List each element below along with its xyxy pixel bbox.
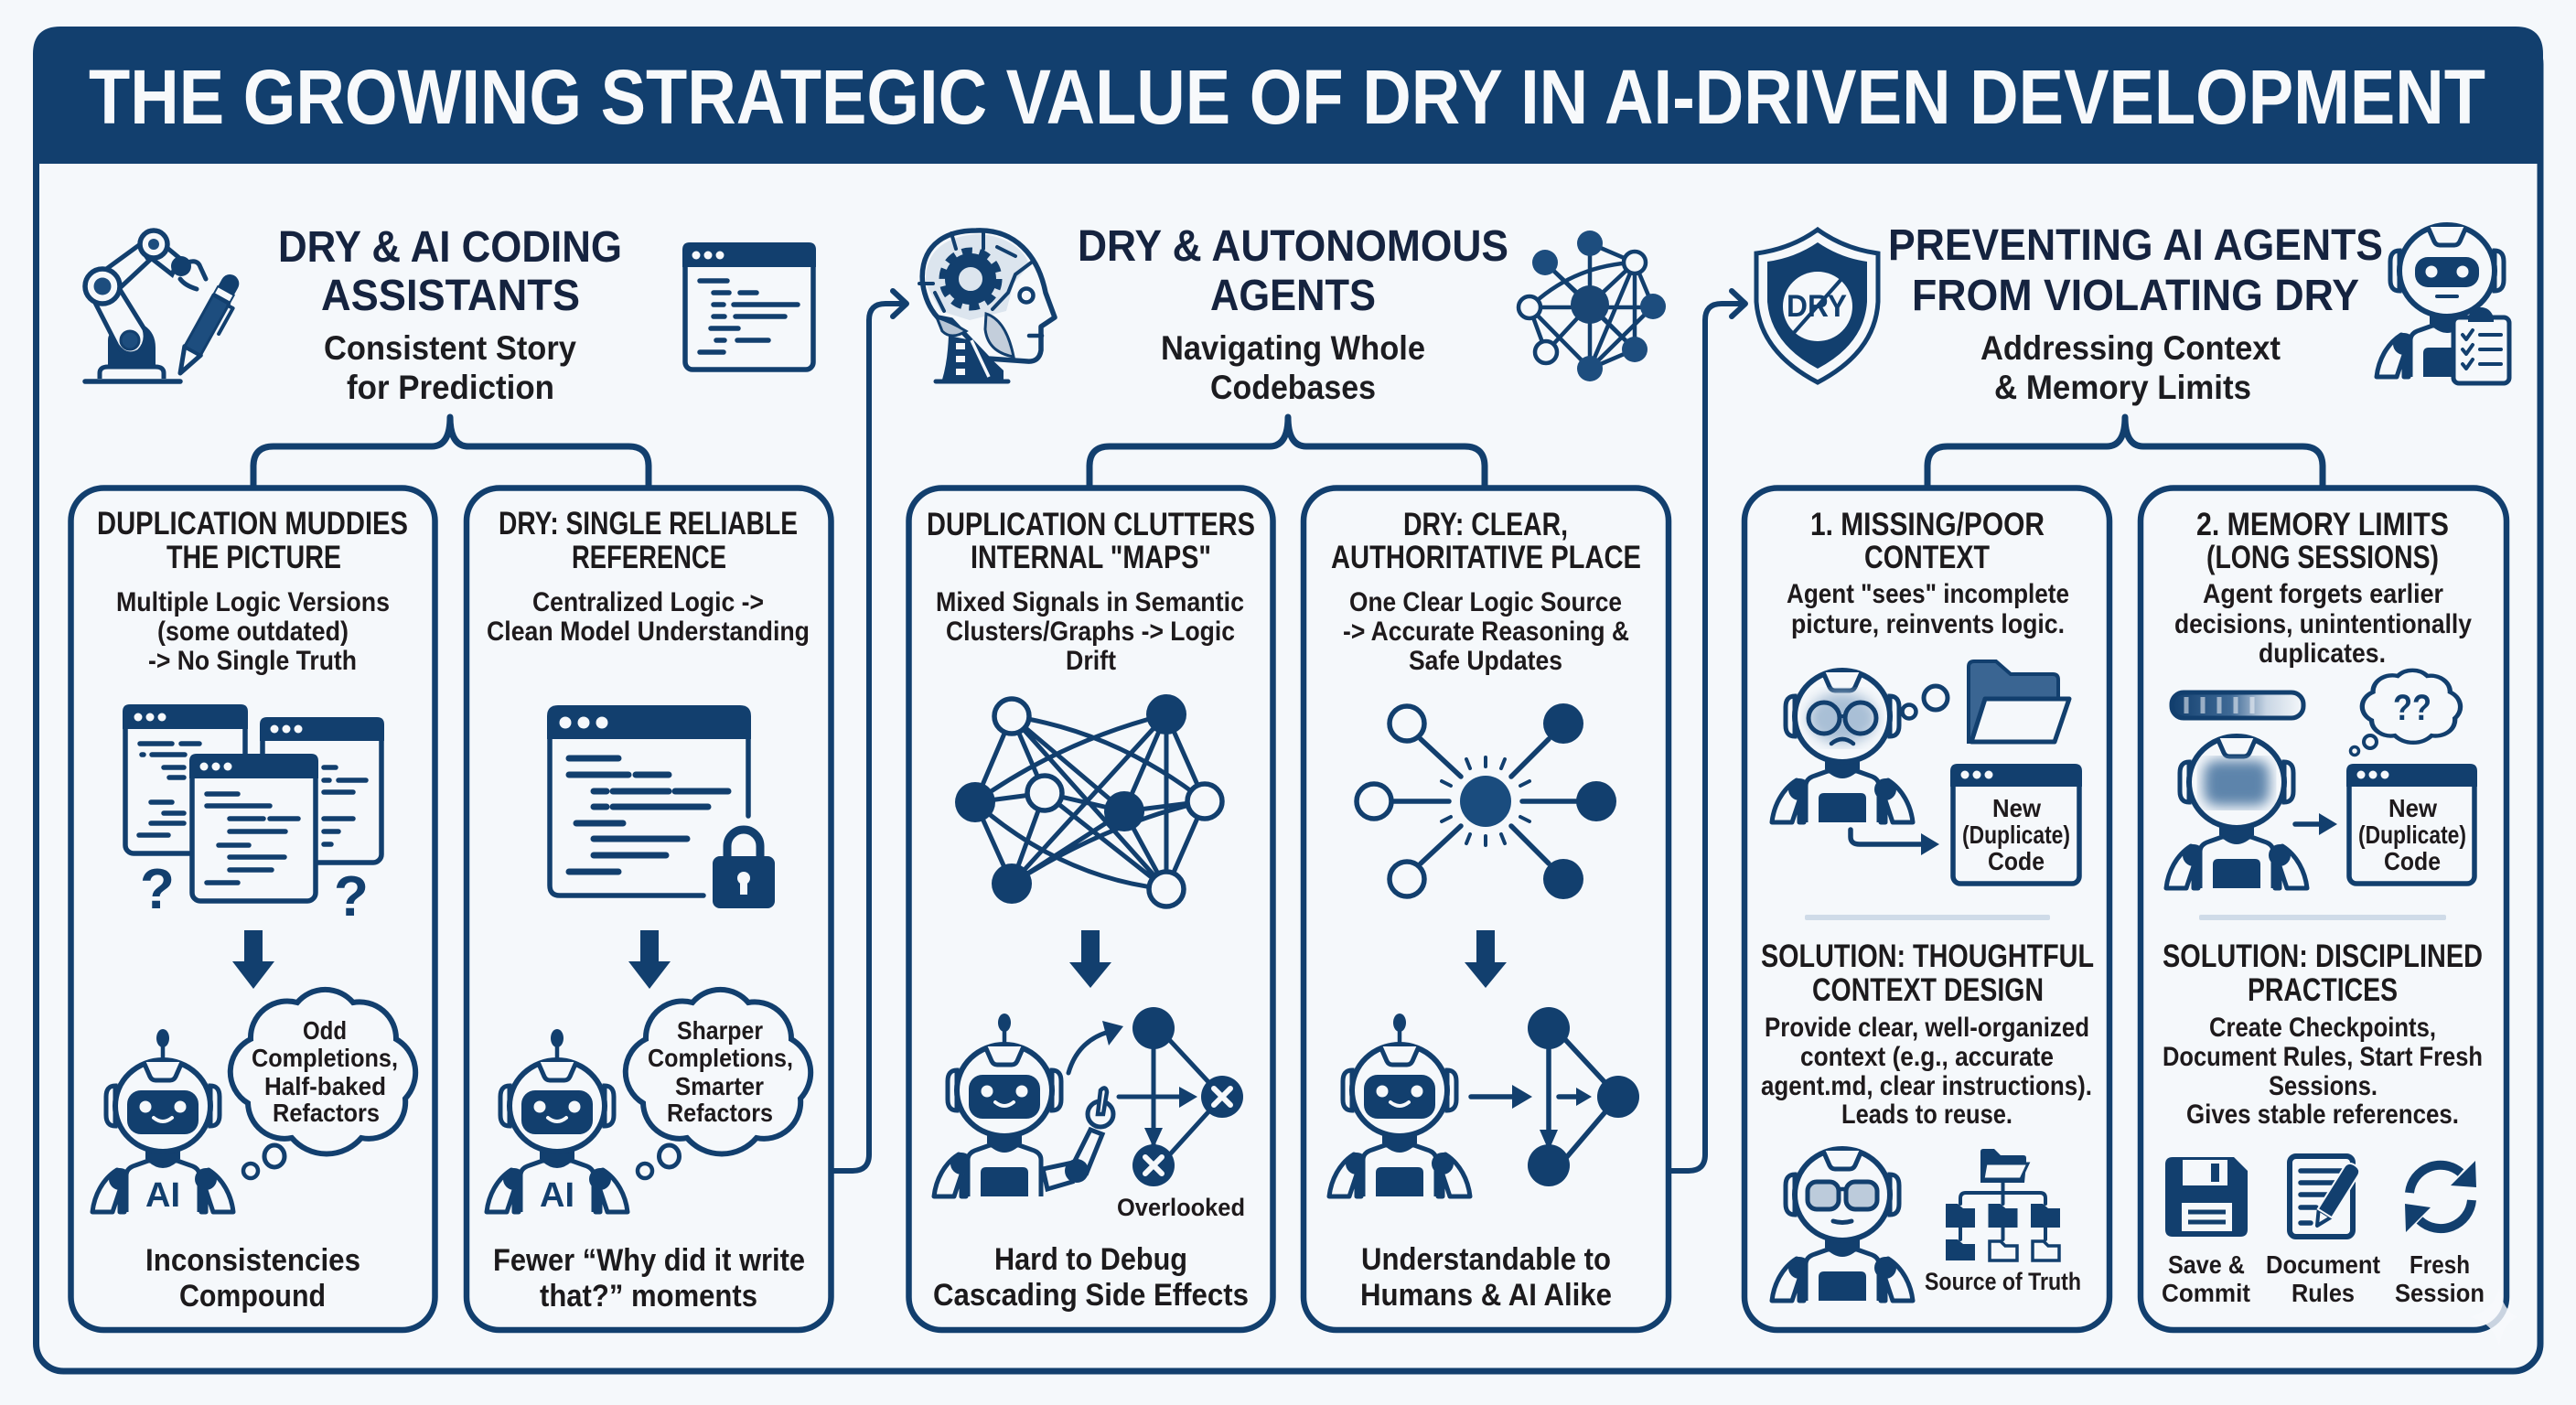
- panel footer: Compound: [179, 1279, 326, 1314]
- panel footer: Fewer “Why did it write: [493, 1243, 805, 1278]
- panel: missing or poor context: [1744, 488, 2109, 1330]
- thought cloud: odd completions: [231, 990, 415, 1178]
- panel: memory limits: [2141, 488, 2506, 1330]
- solution description: Provide clear, well-organized: [1765, 1013, 2089, 1043]
- panel description: Centralized Logic ->: [532, 587, 764, 617]
- heading: DRY and autonomous agents: Codebases: [1210, 369, 1376, 406]
- chart: hub and spoke graph: [1357, 703, 1616, 899]
- chart: tangled node graph: [955, 694, 1222, 906]
- icon: fading progress bar: [2172, 692, 2303, 718]
- icon: fresh session refresh arrows: Session: [2395, 1279, 2485, 1307]
- thought cloud: sharper completions: [626, 990, 810, 1178]
- divider: [1805, 915, 2050, 920]
- panel description: [1343, 587, 1629, 676]
- thought cloud: odd completions: Odd: [303, 1016, 347, 1045]
- panel description: [2174, 579, 2472, 669]
- panel heading: REFERENCE: [572, 540, 726, 575]
- icon: new duplicate code window: [2346, 764, 2477, 884]
- icon: robot pointing at broken graph: Overlooked: [1117, 1194, 1245, 1221]
- icon: robot with checklist: [2377, 225, 2509, 383]
- panel description: [1787, 579, 2069, 639]
- panel heading: (LONG SESSIONS): [2206, 540, 2439, 575]
- connector bracket: column 2: [1089, 417, 1485, 488]
- panel footer: Cascading Side Effects: [933, 1278, 1249, 1313]
- icon: document rules: [2266, 1156, 2380, 1307]
- panel description: [116, 587, 390, 676]
- panel heading: [2196, 507, 2449, 575]
- heading: DRY and autonomous agents: [1078, 222, 1508, 406]
- icon: fresh session refresh arrows: [2395, 1161, 2485, 1307]
- heading: preventing AI agents from violating DRY: PREVENTING AI AGENTS: [1888, 221, 2383, 270]
- divider: [2199, 915, 2446, 920]
- panel footer: [1360, 1242, 1612, 1313]
- panel description: decisions, unintentionally: [2174, 609, 2472, 639]
- panel description: -> Accurate Reasoning &: [1343, 617, 1629, 647]
- icon: folder tree: Source of Truth: [1925, 1268, 2081, 1295]
- thought cloud: question marks: ??: [2393, 688, 2431, 728]
- icon: AI robot: AI: [540, 1176, 574, 1215]
- thought cloud: odd completions: Refactors: [273, 1099, 380, 1127]
- thought cloud: odd completions: Half-baked: [264, 1072, 386, 1100]
- panel: DRY single reliable reference: [467, 488, 831, 1330]
- panel: DRY clear authoritative place: [1304, 488, 1669, 1330]
- solution description: Sessions.: [2269, 1071, 2377, 1101]
- panel heading: DRY: CLEAR,: [1403, 507, 1568, 542]
- panel description: -> No Single Truth: [148, 646, 357, 676]
- panel description: Clusters/Graphs -> Logic: [946, 617, 1235, 647]
- icon: AI robot: AI: [145, 1176, 180, 1215]
- icon: code window with lock: [547, 705, 775, 908]
- icon: robot pointing at broken graph: [934, 1007, 1245, 1221]
- panel: duplication muddies the picture: [71, 488, 435, 1330]
- panel heading: INTERNAL "MAPS": [971, 540, 1211, 575]
- solution description: Create Checkpoints,: [2209, 1013, 2436, 1043]
- panel description: Drift: [1066, 646, 1116, 676]
- heading: DRY and AI coding assistants: for Prediction: [347, 369, 554, 406]
- panel footer: that?” moments: [540, 1279, 757, 1314]
- icon: overlapping code windows with question marks: ?: [140, 858, 175, 921]
- icon: forgetful robot: [2166, 736, 2337, 888]
- panel description: One Clear Logic Source: [1349, 587, 1622, 617]
- icon: overlapping code windows with question marks: ?: [334, 865, 369, 928]
- thought cloud: question marks: [2351, 670, 2461, 756]
- arrow: down: [232, 930, 274, 989]
- panel description: Multiple Logic Versions: [116, 587, 390, 617]
- heading: preventing AI agents from violating DRY: FROM VIOLATING DRY: [1912, 272, 2359, 320]
- solution heading: [1761, 938, 2094, 1008]
- heading: DRY and AI coding assistants: Consistent Story: [324, 329, 576, 367]
- panel footer: [145, 1243, 360, 1314]
- solution description: agent.md, clear instructions).: [1761, 1071, 2092, 1101]
- solution heading: CONTEXT DESIGN: [1812, 972, 2044, 1008]
- panel description: picture, reinvents logic.: [1791, 609, 2065, 639]
- solution heading: PRACTICES: [2248, 972, 2398, 1008]
- icon: robot with sunglasses: [1772, 1149, 1913, 1301]
- panel heading: DUPLICATION CLUTTERS: [927, 507, 1255, 542]
- solution description: Gives stable references.: [2186, 1099, 2459, 1130]
- panel footer: Understandable to: [1361, 1242, 1611, 1277]
- panel description: Agent "sees" incomplete: [1787, 579, 2069, 609]
- panel heading: [1810, 507, 2045, 575]
- icon: new duplicate code window: (Duplicate): [1962, 820, 2070, 849]
- panel description: Safe Updates: [1409, 646, 1562, 676]
- solution heading: SOLUTION: DISCIPLINED: [2163, 938, 2483, 974]
- icon: head with gear: [919, 231, 1055, 381]
- panel description: Clean Model Understanding: [487, 617, 810, 647]
- panel description: (some outdated): [157, 617, 349, 647]
- panel: duplication clutters internal maps: [909, 488, 1273, 1330]
- icon: new duplicate code window: (Duplicate): [2358, 820, 2466, 849]
- panel heading: [499, 506, 798, 575]
- heading: DRY and autonomous agents: Navigating Whole: [1161, 329, 1425, 367]
- icon: folder tree: [1925, 1149, 2081, 1295]
- heading: DRY and autonomous agents: AGENTS: [1210, 272, 1376, 320]
- panel heading: CONTEXT: [1864, 540, 1990, 575]
- thought cloud: sharper completions: Refactors: [667, 1099, 773, 1127]
- arrow: column 2 to column 3: [1671, 291, 1745, 1171]
- panel footer: Inconsistencies: [145, 1243, 360, 1278]
- icon: confused robot with folder: [1772, 661, 2069, 855]
- icon: new duplicate code window: New: [1992, 794, 2041, 822]
- icon: robot with clear graph: [1329, 1007, 1639, 1196]
- arrow: down: [1069, 930, 1111, 988]
- heading: preventing AI agents from violating DRY: & Memory Limits: [1994, 369, 2251, 406]
- panel heading: DRY: SINGLE RELIABLE: [499, 506, 798, 542]
- icon: DRY shield: DRY: [1787, 289, 1847, 324]
- panel heading: [1331, 507, 1641, 575]
- arrow: column 1 to column 2: [833, 291, 907, 1171]
- heading: DRY and AI coding assistants: ASSISTANTS: [321, 272, 580, 320]
- panel description: duplicates.: [2259, 638, 2386, 669]
- icon: new duplicate code window: [1950, 764, 2082, 884]
- icon: save and commit: [2162, 1157, 2250, 1307]
- heading: preventing AI agents from violating DRY: Addressing Context: [1980, 329, 2281, 367]
- heading: DRY and AI coding assistants: DRY & AI CODING: [278, 223, 622, 272]
- panel description: Mixed Signals in Semantic: [936, 587, 1244, 617]
- icon: DRY shield: [1756, 230, 1878, 382]
- panel heading: THE PICTURE: [166, 540, 341, 575]
- icon: fresh session refresh arrows: Fresh: [2410, 1250, 2470, 1279]
- connector bracket: column 1: [253, 417, 649, 488]
- panel heading: [927, 507, 1255, 575]
- solution heading: SOLUTION: THOUGHTFUL: [1761, 938, 2094, 974]
- connector bracket: column 3: [1927, 417, 2323, 488]
- solution description: Document Rules, Start Fresh: [2163, 1042, 2483, 1072]
- arrow: down: [628, 930, 671, 989]
- panel footer: Humans & AI Alike: [1360, 1278, 1612, 1313]
- heading: DRY and AI coding assistants: [278, 223, 622, 406]
- panel heading: 1. MISSING/POOR: [1810, 507, 2045, 542]
- panel footer: [493, 1243, 805, 1314]
- solution description: context (e.g., accurate: [1800, 1042, 2054, 1072]
- panel description: [936, 587, 1244, 676]
- heading: DRY and autonomous agents: DRY & AUTONOMOUS: [1078, 222, 1508, 271]
- panel description: [487, 587, 810, 647]
- thought cloud: sharper completions: Smarter: [675, 1072, 764, 1100]
- icon: network hub: [1519, 231, 1666, 381]
- icon: overlapping code windows with question marks: [123, 704, 384, 928]
- solution description: [2163, 1013, 2483, 1130]
- watermark sparkle: [2470, 1288, 2517, 1346]
- icon: save and commit: Save &: [2168, 1250, 2245, 1279]
- arrow: down: [1465, 930, 1507, 988]
- solution description: Leads to reuse.: [1841, 1099, 2012, 1130]
- thought cloud: sharper completions: Completions,: [648, 1044, 793, 1072]
- icon: document rules: Rules: [2292, 1279, 2355, 1307]
- icon: document rules: Document: [2266, 1250, 2380, 1279]
- icon: new duplicate code window: New: [2388, 794, 2437, 822]
- icon: save and commit: Commit: [2162, 1279, 2250, 1307]
- panel description: Agent forgets earlier: [2203, 579, 2443, 609]
- panel heading: [97, 506, 408, 575]
- panel heading: 2. MEMORY LIMITS: [2196, 507, 2449, 542]
- panel footer: [933, 1242, 1249, 1313]
- icon: robot arm with pen: [85, 231, 247, 381]
- title banner: [33, 27, 2543, 164]
- solution heading: [2163, 938, 2483, 1008]
- panel heading: AUTHORITATIVE PLACE: [1331, 540, 1641, 575]
- icon: code window: [682, 242, 816, 370]
- panel heading: DUPLICATION MUDDIES: [97, 506, 408, 542]
- icon: AI robot: [487, 1029, 628, 1215]
- heading: preventing AI agents from violating DRY: [1888, 221, 2383, 406]
- panel footer: Hard to Debug: [994, 1242, 1187, 1277]
- thought cloud: sharper completions: Sharper: [677, 1016, 763, 1045]
- icon: AI robot: [92, 1029, 233, 1215]
- thought cloud: odd completions: Completions,: [252, 1044, 398, 1072]
- icon: new duplicate code window: Code: [1988, 847, 2045, 875]
- icon: new duplicate code window: Code: [2384, 847, 2441, 875]
- solution description: [1761, 1013, 2092, 1130]
